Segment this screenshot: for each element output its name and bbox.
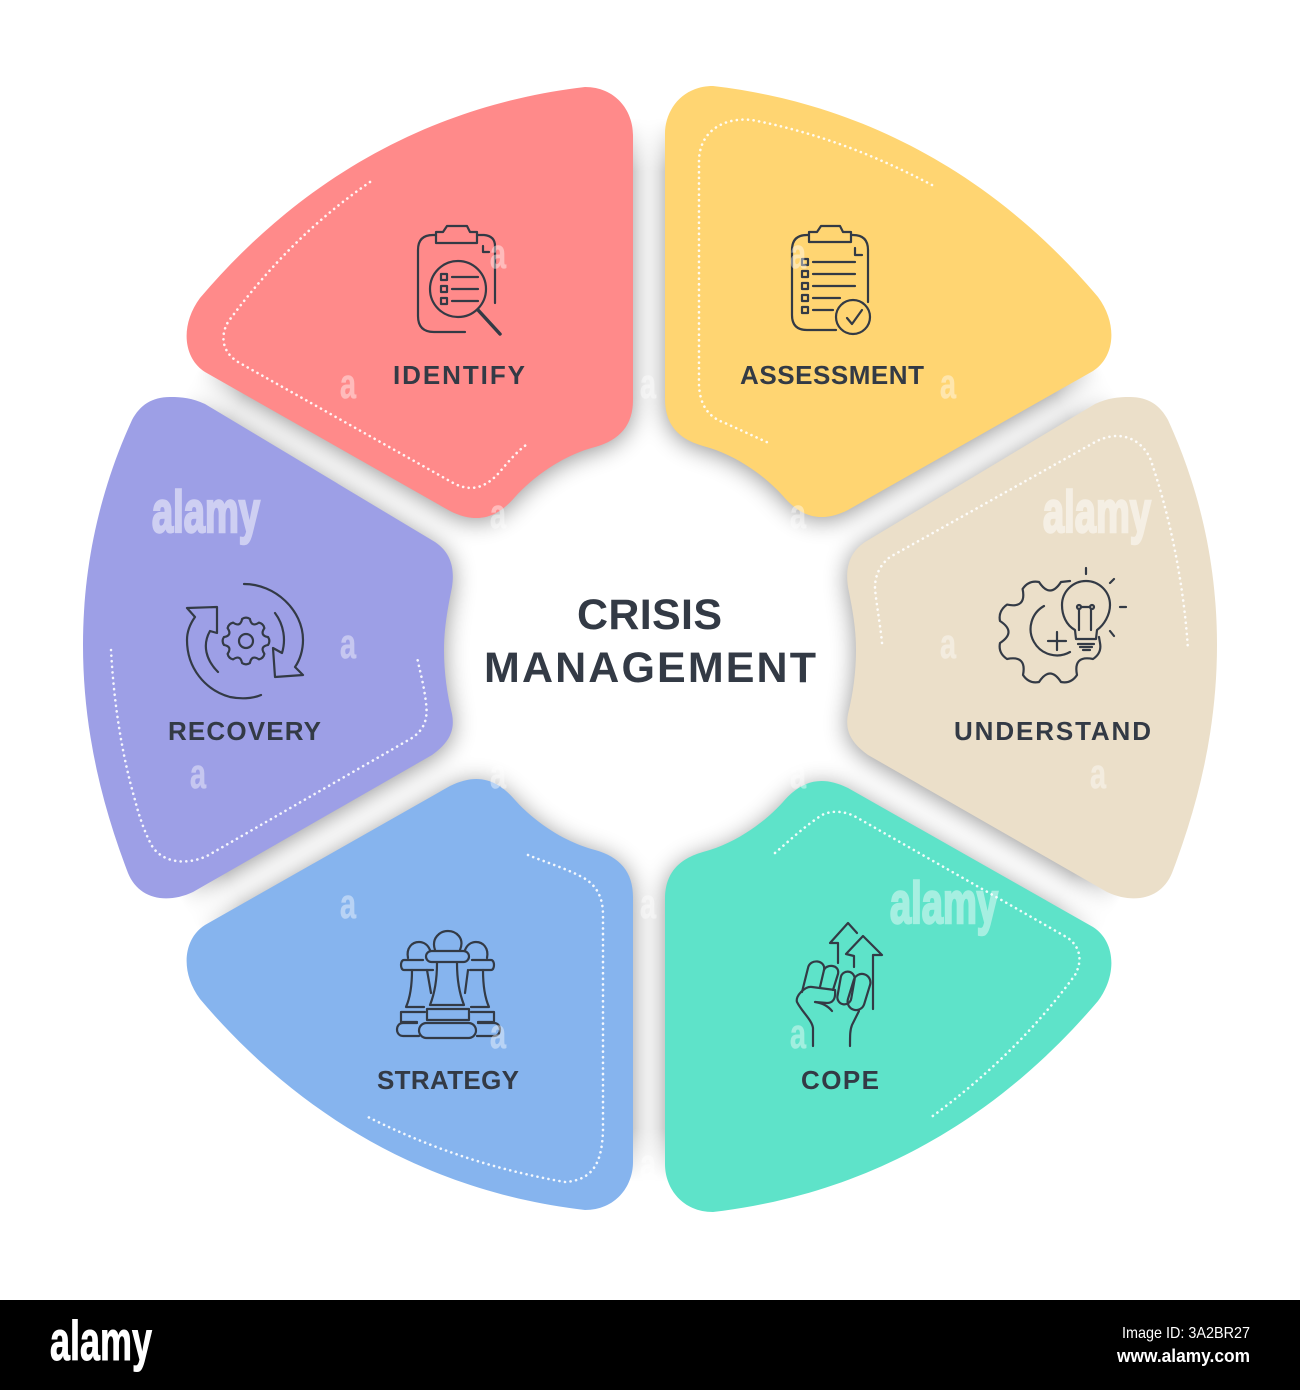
watermarks: alamy — [890, 871, 998, 936]
watermarks: alamy — [1043, 480, 1151, 545]
panel: strategy — [187, 779, 633, 1210]
watermarks: a — [340, 880, 356, 927]
label: understand: UNDERSTAND — [954, 716, 1151, 746]
watermarks: a — [790, 230, 806, 277]
title: MANAGEMENT — [484, 644, 816, 692]
soft shadows in the gaps between segments — [186, 128, 1113, 1172]
watermarks: a — [940, 360, 956, 407]
icon: clipboard with check — [792, 226, 870, 334]
watermarks: a — [790, 1010, 806, 1057]
watermarks: a — [340, 620, 356, 667]
icon: gear and light bulb — [1000, 568, 1126, 682]
watermarks: a — [640, 880, 656, 927]
panel: recovery — [83, 397, 453, 898]
footer website: www.alamy.com — [1116, 1346, 1250, 1366]
icon: raised fist with arrows — [797, 923, 882, 1046]
watermarks: a — [190, 750, 206, 797]
panel: identify — [187, 87, 633, 518]
icon: recovery arrows and gear — [187, 584, 303, 698]
watermarks: a — [340, 360, 356, 407]
watermarks: a — [490, 490, 506, 537]
title: CRISIS — [577, 591, 722, 639]
watermarks: a — [640, 1140, 656, 1187]
footer logo: alamy — [50, 1309, 152, 1372]
watermarks: a — [490, 1010, 506, 1057]
watermarks: a — [790, 750, 806, 797]
panel: understand — [847, 397, 1217, 898]
footer image id: Image ID: 3A2BR27 — [1122, 1325, 1250, 1342]
panel: cope — [665, 781, 1111, 1212]
footer bar — [0, 1300, 1300, 1390]
watermarks: a — [1090, 750, 1106, 797]
watermarks: a — [790, 490, 806, 537]
watermarks: alamy — [152, 480, 260, 545]
label: strategy: STRATEGY — [377, 1065, 519, 1095]
label: recovery: RECOVERY — [168, 716, 321, 746]
icon: clipboard with magnifier — [418, 226, 500, 334]
panel: assessment — [665, 86, 1111, 517]
label: cope: COPE — [801, 1065, 879, 1095]
icon: chess pawns — [397, 931, 500, 1038]
watermarks — [152, 230, 1151, 1187]
title — [484, 591, 816, 692]
watermarks: a — [940, 620, 956, 667]
watermarks: a — [490, 230, 506, 277]
watermarks: a — [490, 750, 506, 797]
label: assessment: ASSESSMENT — [740, 360, 924, 390]
watermarks: a — [640, 360, 656, 407]
label: identify: IDENTIFY — [393, 360, 525, 390]
